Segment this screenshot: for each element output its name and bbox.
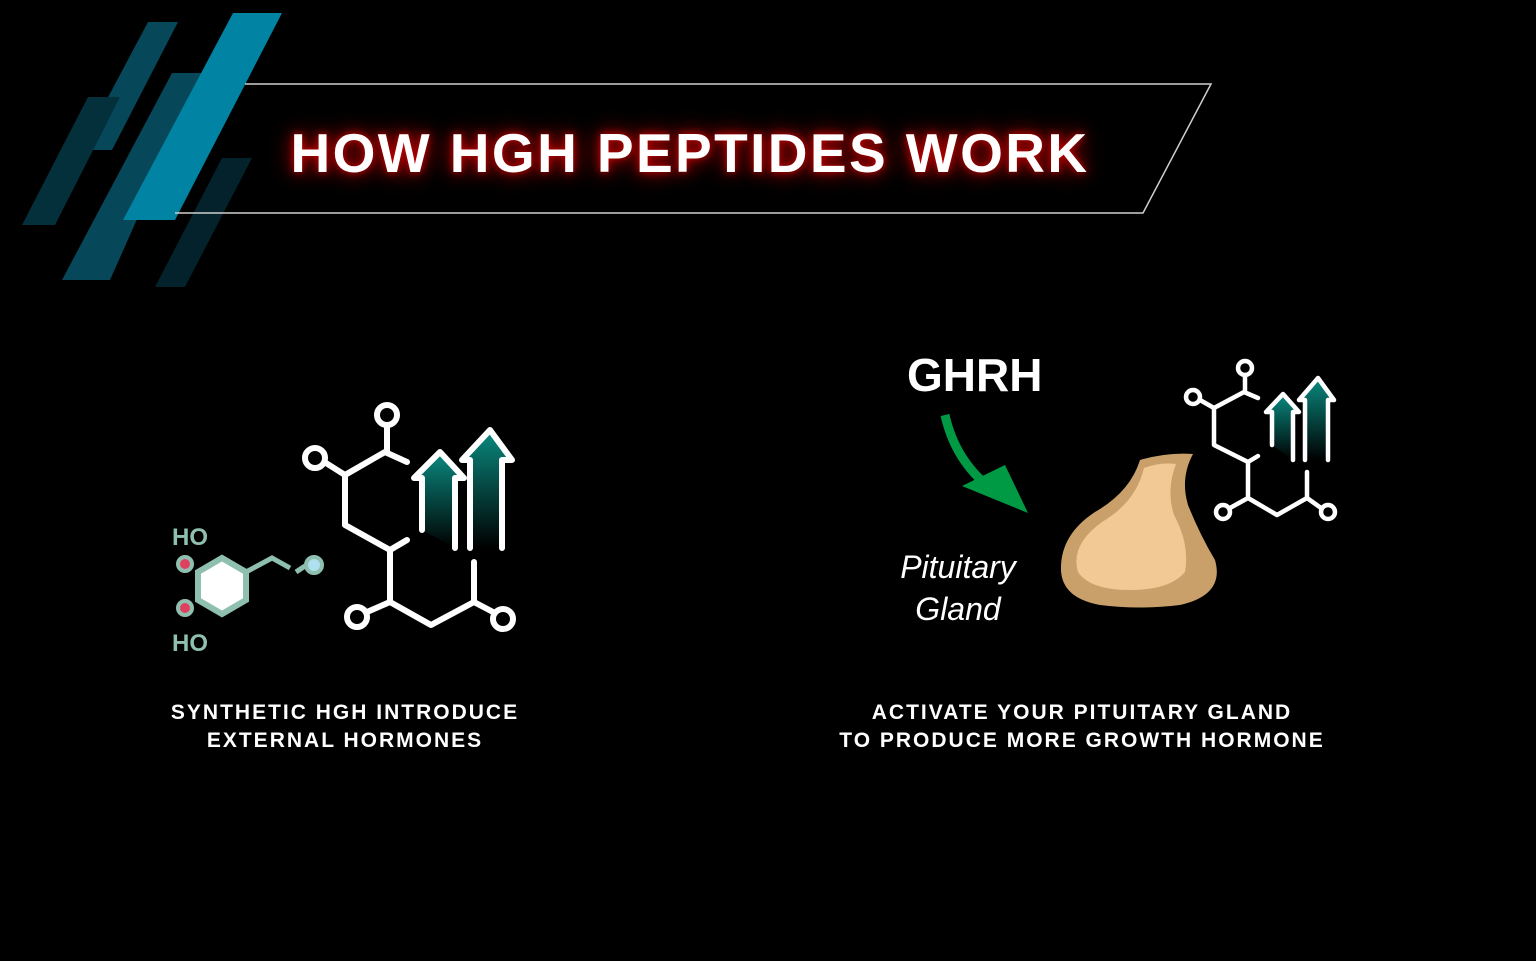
Pituitary Gland label [900, 549, 1018, 627]
caption left: SYNTHETIC HGH INTRODUCE [171, 701, 519, 724]
caption right: ACTIVATE YOUR PITUITARY GLAND [872, 701, 1292, 724]
icon: small molecule: HO [172, 524, 208, 551]
GHRH label: GHRH [907, 349, 1042, 401]
icon: small molecule [172, 524, 322, 657]
caption right: TO PRODUCE MORE GROWTH HORMONE [839, 729, 1325, 752]
caption right [839, 701, 1325, 752]
title: HOW HGH PEPTIDES WORK [290, 122, 1090, 184]
caption left [171, 701, 519, 752]
icon: pituitary gland [1061, 454, 1217, 608]
icon: large molecule with arrows [305, 405, 513, 629]
Pituitary Gland label: Gland [915, 591, 1001, 627]
icon: small molecule right [1186, 361, 1335, 519]
title frame [175, 84, 1211, 213]
caption left: EXTERNAL HORMONES [207, 729, 483, 752]
icon: green arrow [945, 415, 1028, 513]
Pituitary Gland label: Pituitary [900, 549, 1016, 585]
icon: small molecule: HO [172, 630, 208, 657]
